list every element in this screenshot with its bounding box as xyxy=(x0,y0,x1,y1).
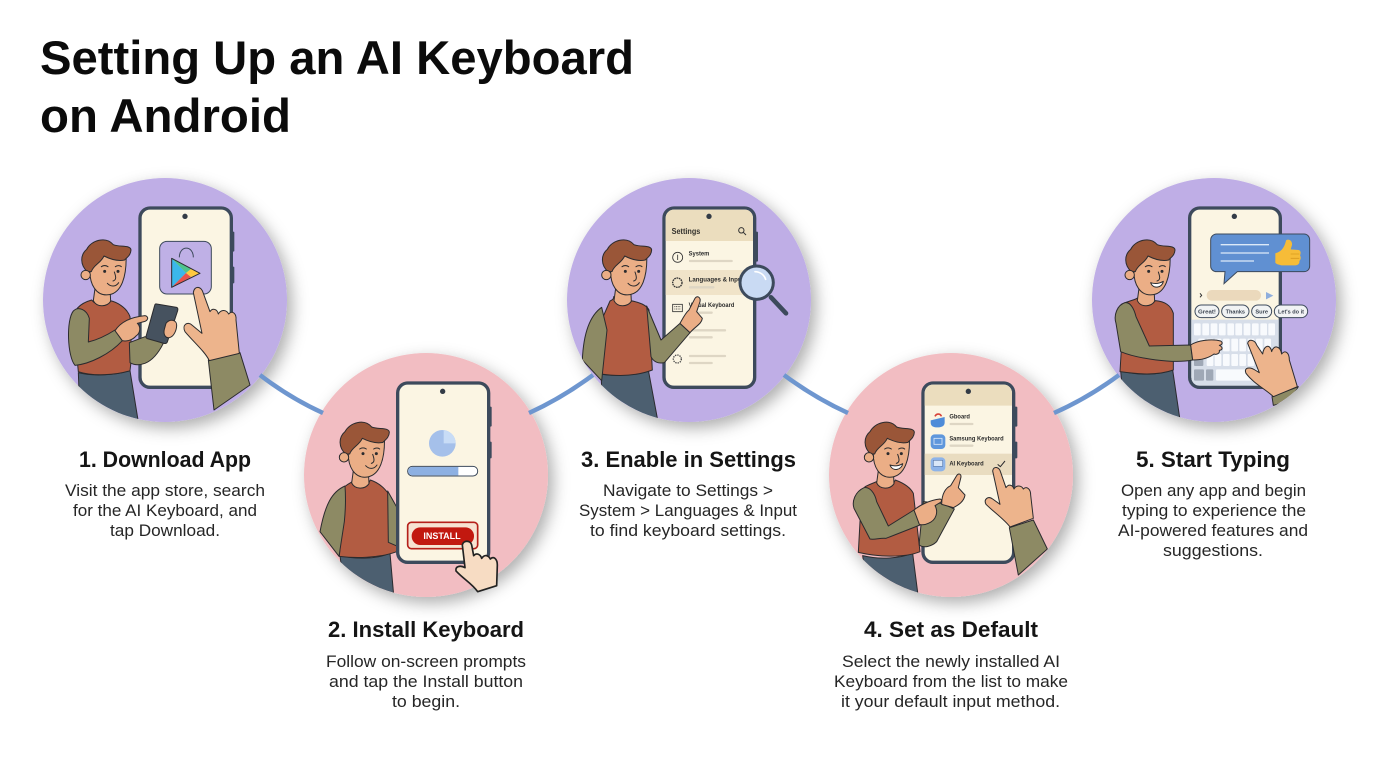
step 5 text: Open any app and begin xyxy=(1121,482,1306,500)
phone: keyboard typing screen xyxy=(1190,208,1280,387)
list item: Samsung Keyboard: Samsung Keyboard xyxy=(949,436,1004,443)
step 2 text: Follow on-screen prompts xyxy=(326,653,526,671)
phone: settings screen: Settings xyxy=(672,227,701,236)
step 1 text: 1. Download App xyxy=(79,447,251,472)
step 4 text: Select the newly installed AI xyxy=(842,653,1060,671)
hand tapping the tile xyxy=(184,287,250,410)
message bubble with thumbs up xyxy=(1211,234,1310,284)
step 4 text xyxy=(834,617,1068,711)
suggestion chips: Great! xyxy=(1198,309,1216,315)
step 5 text: 5. Start Typing xyxy=(1136,447,1290,472)
step 1 text: for the AI Keyboard, and xyxy=(73,502,257,520)
title: Setting Up an AI Keyboard xyxy=(40,31,634,84)
person beside the phone xyxy=(320,422,398,595)
list item: Gboard: Gboard xyxy=(949,414,970,421)
step 1 text xyxy=(65,447,265,540)
step 2 text: to begin. xyxy=(392,693,460,711)
button: install xyxy=(408,522,478,549)
hand tapping install xyxy=(456,541,497,592)
on-screen keyboard xyxy=(1191,320,1279,386)
step 2 text: and tap the Install button xyxy=(329,673,523,691)
suggestion chips: Sure xyxy=(1255,309,1268,315)
hand typing on keyboard xyxy=(1245,340,1298,405)
step 4 text: Keyboard from the list to make xyxy=(834,673,1068,691)
list item: AI Keyboard selected xyxy=(931,457,1005,471)
panel: step 2 illustration circle xyxy=(304,353,548,597)
person pointing at a list item xyxy=(582,240,702,420)
step 5 text: typing to experience the xyxy=(1122,502,1306,520)
suggestion chips: Thanks xyxy=(1226,309,1245,315)
suggestion chips: Let's do it xyxy=(1278,309,1304,315)
panel: step 5 illustration circle xyxy=(1092,178,1336,422)
person pointing with both hands xyxy=(853,422,965,595)
hand tapping AI Keyboard xyxy=(985,467,1047,575)
panel: step 4 illustration circle xyxy=(829,353,1073,597)
phone: keyboard list screen xyxy=(923,383,1017,562)
step 5 text: suggestions. xyxy=(1163,542,1263,560)
step 1 text: Visit the app store, search xyxy=(65,482,265,500)
icon: Play Store tile xyxy=(160,241,211,294)
arrow: connector step 1 to 2 xyxy=(260,375,323,413)
arrow: connector step 3 to 4 xyxy=(784,375,848,413)
phone: settings screen: Languages & Input xyxy=(689,276,745,283)
title xyxy=(40,31,634,142)
arrow: connector step 2 to 3 xyxy=(529,375,593,413)
list item: Samsung Keyboard xyxy=(931,434,1004,449)
step 5 text xyxy=(1118,447,1308,560)
panel: step 1 illustration circle xyxy=(43,178,287,422)
phone: settings screen xyxy=(664,208,758,387)
panel: step 3 illustration circle xyxy=(567,178,811,422)
list item: AI Keyboard selected: AI Keyboard xyxy=(949,461,984,468)
person typing xyxy=(1115,240,1222,420)
step 3 text: Navigate to Settings > xyxy=(603,482,773,500)
title: on Android xyxy=(40,89,291,142)
step 3 text: 3. Enable in Settings xyxy=(581,447,796,472)
step 4 text: it your default input method. xyxy=(841,693,1060,711)
arrow: connector step 4 to 5 xyxy=(1054,375,1119,413)
step 3 text: System > Languages & Input xyxy=(579,502,797,520)
phone: settings screen: System xyxy=(689,251,710,258)
step 3 text: to find keyboard settings. xyxy=(590,522,786,540)
suggestion chips xyxy=(1195,305,1308,318)
step 2 text: 2. Install Keyboard xyxy=(328,617,524,642)
phone: app store screen xyxy=(140,208,234,387)
button: install: INSTALL xyxy=(423,531,461,541)
list item: Gboard xyxy=(931,414,972,427)
step 4 text: 4. Set as Default xyxy=(864,617,1038,642)
step 5 text: AI-powered features and xyxy=(1118,522,1308,540)
icon: magnifying glass xyxy=(740,266,786,313)
step 3 text xyxy=(579,447,797,540)
step 2 text xyxy=(326,617,526,711)
phone: install screen xyxy=(398,383,492,562)
person holding a small phone xyxy=(68,240,178,420)
step 1 text: tap Download. xyxy=(110,522,220,540)
phone: settings screen: Virtual Keyboard xyxy=(689,302,734,309)
